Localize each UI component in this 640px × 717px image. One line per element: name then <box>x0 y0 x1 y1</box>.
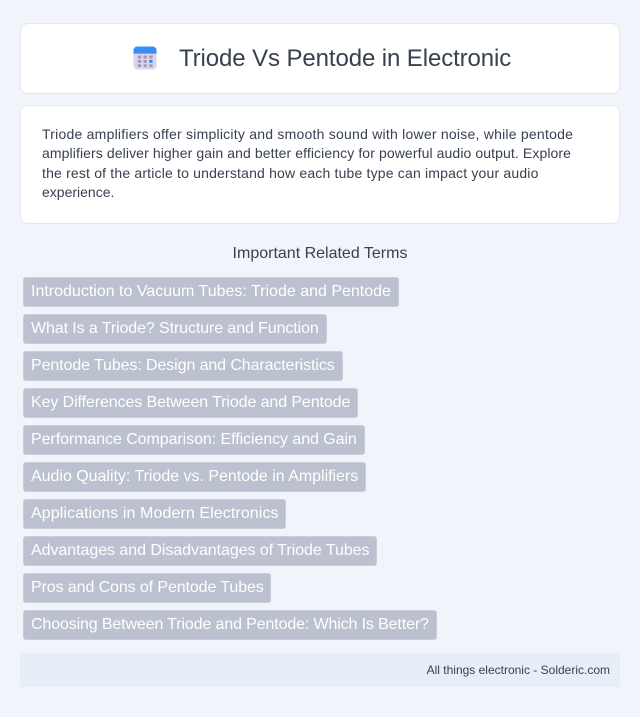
term tag 2 <box>23 314 327 344</box>
term tag 3: Pentode Tubes: Design and Characteristics <box>31 357 335 374</box>
footer bar <box>20 653 620 687</box>
term tag 6: Audio Quality: Triode vs. Pentode in Amplifiers <box>31 468 358 485</box>
title: Triode Vs Pentode in Electronic <box>179 45 511 72</box>
term tag 6 <box>23 462 366 492</box>
term tag 10: Choosing Between Triode and Pentode: Which Is Better? <box>31 616 429 633</box>
term tag 1 <box>23 277 399 307</box>
term tag 4: Key Differences Between Triode and Pentode <box>31 394 350 411</box>
term tag 9 <box>23 573 271 603</box>
term tag 10 <box>23 610 437 640</box>
term tag 7: Applications in Modern Electronics <box>31 505 279 522</box>
intro paragraph: experience. <box>42 184 114 200</box>
intro text panel <box>20 105 620 224</box>
intro paragraph <box>42 126 573 200</box>
term tag 7 <box>23 499 286 529</box>
section heading: Important Related Terms <box>233 245 407 262</box>
term tag 8 <box>23 536 377 566</box>
intro paragraph: amplifiers deliver higher gain and better efficiency for powerful audio output. Explore <box>42 145 571 161</box>
header panel <box>20 23 620 94</box>
term tag 1: Introduction to Vacuum Tubes: Triode and Pentode <box>31 283 391 300</box>
term tag 4 <box>23 388 358 418</box>
icon: calendar <box>133 46 157 70</box>
intro paragraph: Triode amplifiers offer simplicity and smooth sound with lower noise, while pentode <box>42 126 573 142</box>
term tag 8: Advantages and Disadvantages of Triode Tubes <box>31 542 369 559</box>
footer credit: All things electronic - Solderic.com <box>427 663 610 677</box>
intro paragraph: the rest of the article to understand how each tube type can impact your audio <box>42 165 539 181</box>
term tag 5: Performance Comparison: Efficiency and Gain <box>31 431 357 448</box>
term tag 2: What Is a Triode? Structure and Function <box>31 320 319 337</box>
term tag 3 <box>23 351 343 381</box>
related terms list <box>23 277 437 640</box>
term tag 9: Pros and Cons of Pentode Tubes <box>31 579 264 596</box>
term tag 5 <box>23 425 365 455</box>
